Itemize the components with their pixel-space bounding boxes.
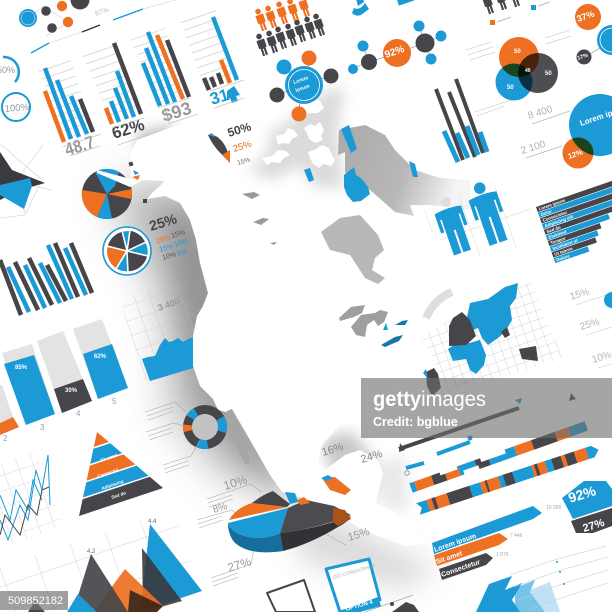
values: map percent labels: 27% bbox=[226, 554, 253, 575]
circle: 37% bbox=[575, 4, 612, 64]
coastal shadow bbox=[110, 125, 440, 590]
chart: block columns: 62% bbox=[94, 354, 107, 360]
values: map percent labels bbox=[212, 441, 384, 575]
chart: pyramid: Consectet bbox=[97, 467, 119, 479]
chart: horizontal bars: Ut labore bbox=[554, 246, 574, 257]
rings: top left: 100% bbox=[4, 102, 30, 115]
continent: North America landmass bbox=[97, 100, 480, 546]
map: blue territories bbox=[341, 125, 418, 202]
network: blue hub: ipsum bbox=[295, 83, 311, 94]
values: right edge: 15% bbox=[569, 286, 591, 303]
chart: horizontal bars: Sed do bbox=[546, 225, 562, 234]
panel: dark arrow strokes bbox=[399, 393, 576, 475]
values: map percent labels: 24% bbox=[359, 448, 384, 466]
label bars: 10 000 bbox=[546, 505, 562, 511]
values under bars: 62% bbox=[110, 115, 147, 143]
bubbles: blue and orange: 12% bbox=[567, 147, 584, 161]
legend: top squares bbox=[490, 2, 550, 25]
chart: block columns: 3 bbox=[40, 423, 45, 432]
icon: small person bbox=[434, 204, 476, 257]
chart: block columns: 85% bbox=[15, 365, 28, 371]
map: Baja California bbox=[227, 409, 250, 464]
chart: Venn: 40 bbox=[525, 68, 531, 74]
label bars: Sit amet bbox=[435, 550, 464, 566]
badge: 92% bbox=[562, 481, 612, 535]
chart: triangles bbox=[0, 510, 202, 612]
chart: area bbox=[142, 338, 200, 381]
chart: blue fan bbox=[476, 576, 560, 612]
chart: 50% half wedge: 15% bbox=[237, 156, 251, 167]
chart: triangles: 4.2 bbox=[87, 549, 96, 555]
chart: 50% half wedge: 50% bbox=[226, 119, 253, 140]
label bars: Consectetur bbox=[440, 559, 482, 579]
network: blue hub bbox=[270, 50, 338, 122]
chart: horizontal bars: Tempor bbox=[550, 236, 567, 245]
values: right edge bbox=[569, 286, 612, 368]
chart: donut bbox=[181, 403, 229, 451]
chart: block columns: 5 bbox=[112, 397, 117, 406]
label: 25% table: 5% bbox=[177, 248, 188, 258]
values: map percent labels: 15% bbox=[346, 526, 371, 544]
values under bars: 31 bbox=[208, 85, 231, 109]
values: map percent labels: 8% bbox=[212, 501, 229, 516]
chart: block columns: 2 bbox=[3, 434, 8, 443]
chart: Venn bbox=[496, 37, 558, 100]
grey marker bbox=[441, 197, 451, 207]
network: top icon bbox=[352, 0, 414, 16]
box: grey option bbox=[267, 580, 315, 612]
chart: block columns: 30% bbox=[65, 388, 78, 394]
grid: area chart bbox=[120, 280, 215, 385]
chart: horizontal bars: Dolore bbox=[556, 253, 571, 263]
label: 25% table: 10% bbox=[174, 238, 189, 249]
watermark: gettyimages banner bbox=[361, 378, 612, 438]
network: top left circles bbox=[19, 0, 110, 36]
chart: Venn: 50 bbox=[545, 71, 552, 77]
labels: donut callouts bbox=[145, 402, 346, 586]
rings: top left bbox=[0, 57, 30, 121]
chart: wide bars bbox=[0, 243, 92, 315]
label: 25% table: 25% bbox=[156, 234, 171, 245]
circle: 37%: 37% bbox=[575, 9, 596, 24]
chart: horizontal bars: Consectetur bbox=[542, 210, 568, 223]
values: map percent labels: 16% bbox=[320, 441, 345, 459]
bar chart: 31 bbox=[204, 17, 237, 90]
watermark: gettyimages banner: Credit: bgblue bbox=[373, 415, 458, 429]
network: blue hub: Lorem bbox=[293, 75, 310, 86]
bar grid rules bbox=[38, 8, 238, 140]
chart: tall bars bbox=[436, 79, 487, 162]
bar chart: 48.7 bbox=[45, 68, 93, 142]
caption: people network bbox=[254, 13, 326, 57]
bar chart: 62% bbox=[106, 43, 141, 124]
label bars: 7 446 bbox=[510, 533, 523, 539]
islands near Alaska bbox=[128, 161, 147, 203]
chart bottom mini line bbox=[365, 595, 419, 612]
chart: horizontal bars: Lorem ipsum bbox=[538, 198, 566, 211]
chart: pie segmented bbox=[103, 227, 151, 275]
label: 25% table: 10% bbox=[162, 251, 177, 262]
watermark: image id: 509852182 bbox=[8, 595, 63, 607]
label: 25% table: 15% bbox=[171, 229, 186, 240]
chart: pyramid bbox=[79, 432, 163, 516]
chart: Venn: 50 bbox=[507, 85, 514, 91]
chart: radar bbox=[0, 135, 52, 220]
bar chart: $93 bbox=[143, 32, 189, 106]
badge: 92%: 92% bbox=[566, 482, 598, 506]
label: 25% table: 15% bbox=[159, 243, 174, 254]
label bars: Lorem ipsum bbox=[433, 533, 477, 554]
values: map percent labels: 10% bbox=[222, 472, 249, 493]
chart: line chart bbox=[0, 451, 63, 548]
panel: people grid bbox=[415, 178, 540, 263]
chart: block columns: 4 bbox=[76, 409, 81, 418]
bubbles: blue and orange bbox=[562, 94, 612, 168]
values: right edge: 25% bbox=[579, 316, 601, 333]
chart: horizontal bars: Eiusmod bbox=[548, 229, 567, 240]
label: 25% table bbox=[147, 210, 189, 262]
network: top left circles: 67% bbox=[94, 7, 110, 18]
caption lines: Venn bbox=[466, 30, 571, 116]
label bars: 1 876 bbox=[496, 552, 509, 558]
chart: pie top bbox=[82, 169, 132, 219]
chart: Venn: 50 bbox=[514, 49, 521, 55]
network: orange 92%: 92% bbox=[383, 44, 406, 61]
chart: pyramid: Adipiscing bbox=[101, 479, 124, 491]
badge: 92%: 27% bbox=[581, 517, 606, 535]
chart: horizontal bars bbox=[536, 178, 612, 263]
icon: dark people top bbox=[480, 0, 521, 15]
panel: world map bbox=[420, 282, 563, 396]
label bars bbox=[432, 505, 562, 580]
circle: 37%: 17% bbox=[577, 53, 589, 62]
chart: 3D pie bbox=[228, 491, 351, 552]
watermark: gettyimages banner: gettyimages bbox=[373, 388, 486, 411]
chart: horizontal bars: Incididunt ut bbox=[552, 238, 579, 251]
ribbon: multicolour bar two bbox=[416, 444, 600, 515]
icon: big person bbox=[464, 178, 512, 248]
chart: pyramid: Sed do bbox=[111, 490, 127, 500]
top axis ticks bbox=[31, 0, 175, 53]
chart: block columns bbox=[0, 319, 128, 443]
map: Great Lakes bbox=[339, 305, 408, 347]
values under bars: 48.7 bbox=[62, 132, 97, 160]
chart: 50% half wedge bbox=[208, 119, 254, 167]
values: 8 400 and 2 100 bbox=[520, 104, 570, 158]
map: gulf coast wedge bbox=[321, 475, 351, 495]
map: Hudson Bay bbox=[338, 125, 470, 216]
values: 8 400 and 2 100: 8 400 bbox=[527, 104, 554, 122]
values under bars: $93 bbox=[159, 98, 194, 126]
chart: 50% half wedge: 25% bbox=[232, 139, 254, 155]
value: 3 400: 3 400 bbox=[156, 296, 181, 313]
values under bars bbox=[62, 80, 244, 160]
box: option 4: SEO CONSULTANCY bbox=[332, 563, 376, 580]
ribbon: multicolour bar one bbox=[409, 419, 589, 495]
chart: horizontal bars: Adipiscing elit bbox=[544, 214, 574, 228]
chart: horizontal bars: Dolor bbox=[540, 209, 553, 217]
chart: pyramid: Sit amet bbox=[100, 452, 118, 463]
icons: orange people bbox=[253, 0, 311, 32]
watermark: image id bbox=[0, 591, 68, 610]
network: orange 92% bbox=[348, 20, 446, 74]
chart: triangles: 4.4 bbox=[148, 519, 157, 525]
values: 8 400 and 2 100: 2 100 bbox=[520, 139, 547, 157]
list: bottom right rules bbox=[510, 546, 608, 609]
map: grey interior region bbox=[321, 215, 385, 284]
map: Arctic islands bbox=[242, 88, 351, 245]
box: option 4 bbox=[326, 559, 381, 612]
label: 25% table: 25% bbox=[147, 210, 179, 234]
